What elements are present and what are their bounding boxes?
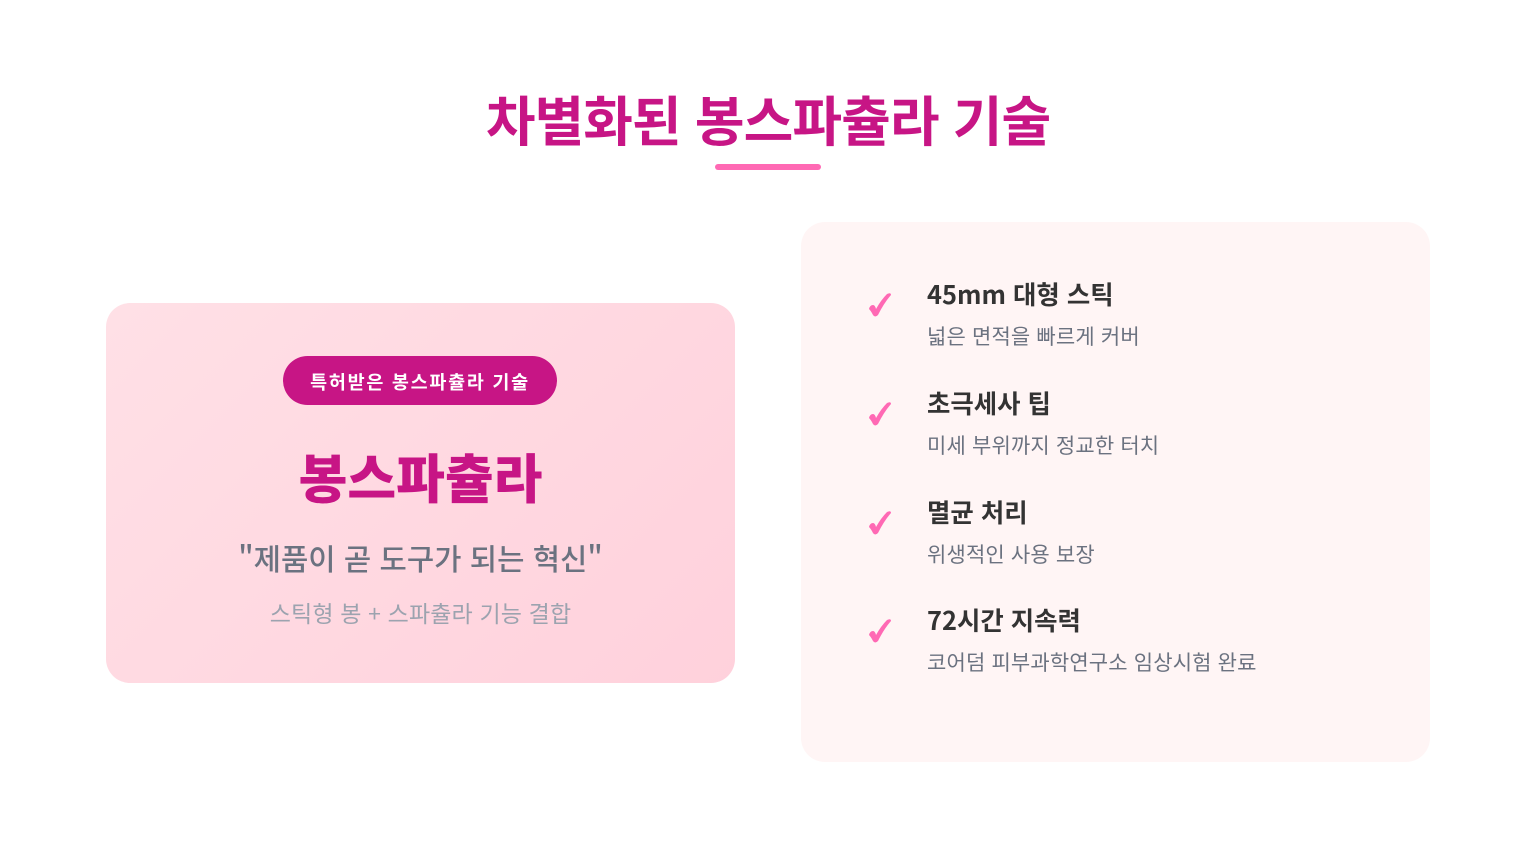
feature description: 위생적인 사용 보장: [927, 539, 1095, 569]
title underline: [715, 164, 821, 170]
feature heading: 멸균 처리: [927, 494, 1028, 530]
icon: check: [869, 293, 891, 316]
feature description: 코어덤 피부과학연구소 임상시험 완료: [927, 647, 1257, 677]
feature: 45mm stick: [869, 276, 1140, 351]
icon: check: [869, 402, 891, 426]
feature heading: 45mm 대형 스틱: [927, 276, 1114, 312]
feature: ultra-fine tip: [869, 385, 1159, 460]
product name: 봉스파츌라: [299, 438, 542, 514]
icon: check: [869, 511, 891, 534]
feature description: 미세 부위까지 정교한 터치: [927, 430, 1159, 460]
badge: 특허받은 봉스파츌라 기술: [310, 369, 530, 395]
icon: check: [869, 619, 891, 642]
feature description: 넓은 면적을 빠르게 커버: [927, 321, 1140, 351]
feature: 72 hour wear: [869, 602, 1257, 677]
title: 차별화된 봉스파츌라 기술: [486, 78, 1050, 157]
quote: "제품이 곧 도구가 되는 혁신": [238, 536, 603, 579]
description: 스틱형 봉 + 스파츌라 기능 결합: [270, 595, 571, 629]
panel: features: [801, 222, 1430, 762]
panel: product card: [106, 303, 735, 683]
feature heading: 72시간 지속력: [927, 602, 1081, 638]
feature: sterilized: [869, 494, 1095, 569]
feature heading: 초극세사 팁: [927, 385, 1051, 421]
badge: [283, 356, 557, 405]
